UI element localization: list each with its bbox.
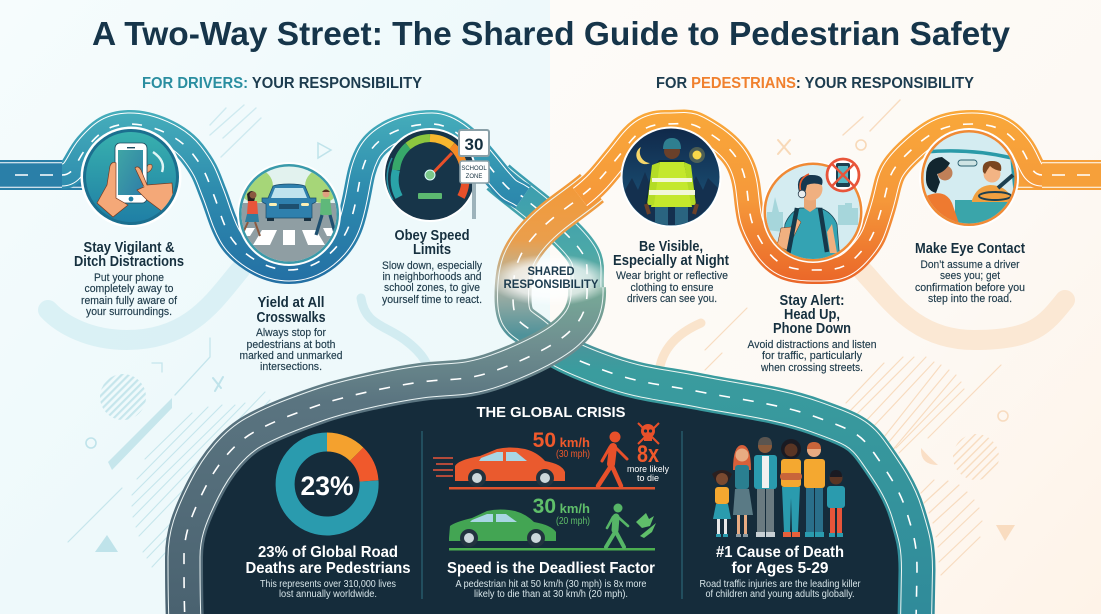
figure: girl [712, 470, 732, 537]
figure: boy [827, 470, 845, 537]
label: 50 km/h: (30 mph) [556, 449, 590, 460]
illustration: red car at 50 km/h [433, 448, 655, 490]
text block: 23% of road deaths: 23% of Global Road [258, 544, 398, 561]
text block: stay alert [748, 293, 876, 374]
text block: stay alert: Stay Alert: [780, 293, 844, 309]
illustration: green car at 30 km/h [449, 510, 655, 550]
text block: make eye contact: Make Eye Contact [915, 241, 1025, 257]
background: right half [550, 0, 1101, 614]
figure: woman with crossed arms [780, 439, 802, 537]
icon: speedometer with school zone sign: ZONE [466, 174, 482, 180]
label: shared responsibility [489, 254, 613, 306]
illustration: group of children and young adults [712, 437, 845, 537]
background: left half [0, 0, 550, 614]
text block: stay alert: when crossing streets. [760, 362, 863, 374]
text block: make eye contact: step into the road. [928, 293, 1012, 305]
icon: pedestrian with head up and headphones [762, 158, 864, 263]
text block: stay vigilant: Stay Vigilant & [84, 240, 175, 256]
text block: stay alert: for traffic, particularly [762, 350, 862, 362]
text block: yield at crosswalks [240, 295, 342, 373]
text block: stay vigilant: Put your phone [94, 272, 164, 284]
icon: eye contact with driver [919, 128, 1020, 232]
figure: woman [733, 445, 753, 537]
callout: 8x more likely to die [627, 441, 669, 484]
text block: be visible [613, 239, 729, 305]
text block: number one cause of death: of children and young adults globally. [706, 589, 854, 600]
chart: 23% donut [285, 442, 369, 526]
text block: number one cause of death: for Ages 5-29 [732, 560, 829, 577]
text block: 23% of road deaths [246, 544, 410, 600]
icon: hands holding a phone [80, 126, 182, 228]
text block: obey speed limits: Slow down, especially [382, 260, 482, 272]
icon: skull and crossbones [638, 423, 659, 444]
text block: number one cause of death: Road traffic injuries are the leading killer [700, 579, 861, 590]
panel: the global crisis dark area [184, 350, 917, 614]
icon: green pedestrian [606, 504, 628, 547]
text block: number one cause of death [700, 544, 861, 600]
text block: stay vigilant [74, 240, 184, 318]
icon: speedometer with school zone sign [383, 128, 489, 222]
label: 30 km/h: (20 mph) [556, 516, 590, 527]
label: 50 km/h: 50 km/h [533, 429, 590, 452]
road: pedestrians orange winding road [513, 124, 1101, 614]
text block: make eye contact: confirmation before you [915, 282, 1025, 294]
text block: yield at crosswalks: Yield at All [258, 295, 324, 311]
text block: obey speed limits: in neighborhoods and [382, 271, 482, 283]
decorative background shapes right [659, 100, 1065, 575]
label: 30 km/h: 30 km/h [533, 495, 590, 518]
text block: stay alert: Head Up, [784, 307, 840, 323]
heading: for pedestrians: FOR PEDESTRIANS: YOUR RESPONSIBILITY [656, 75, 974, 92]
road: grey road leading into the global crisis [184, 288, 587, 614]
callout: 8x more likely to die: to die [637, 473, 659, 484]
text block: stay vigilant: remain fully aware of [81, 295, 178, 307]
text block: obey speed limits: Obey Speed [394, 228, 470, 244]
text block: yield at crosswalks: Always stop for [256, 327, 326, 339]
text block: speed is the deadliest factor [447, 560, 655, 600]
callout: 8x more likely to die: more likely [627, 464, 669, 475]
icon: red pedestrian [598, 432, 627, 486]
icon: speedometer with school zone sign: SCHOOL [461, 166, 487, 172]
heading: for drivers: FOR DRIVERS: YOUR RESPONSIBILITY [142, 75, 422, 92]
text block: yield at crosswalks: Crosswalks [256, 310, 326, 326]
text block: stay vigilant: completely away to [84, 283, 174, 295]
icon: leaves sprig [636, 513, 656, 538]
text block: 23% of road deaths: This represents over 310,000 lives [260, 579, 396, 590]
text block: 23% of road deaths: lost annually worldwide. [279, 589, 377, 600]
text block: yield at crosswalks: marked and unmarked [240, 350, 342, 362]
text block: be visible: drivers can see you. [627, 293, 717, 305]
text block: be visible: Especially at Night [613, 253, 729, 269]
text block: obey speed limits [382, 228, 482, 306]
text block: obey speed limits: school zones, to give [384, 282, 480, 294]
decorative background shapes left [48, 105, 432, 567]
icon: speedometer with school zone sign: 30 [465, 135, 483, 154]
divider left [422, 431, 423, 599]
text block: yield at crosswalks: intersections. [260, 361, 322, 373]
text block: be visible: Wear bright or reflective [616, 270, 728, 282]
text block: obey speed limits: yourself time to react. [382, 294, 482, 306]
icon: person in reflective vest at night [620, 126, 722, 230]
text block: speed is the deadliest factor: likely to die than at 30 km/h (20 mph). [474, 589, 628, 600]
label: shared responsibility: RESPONSIBILITY [504, 277, 598, 291]
label: shared responsibility: SHARED [528, 264, 575, 278]
callout: 8x more likely to die: 8x [637, 441, 660, 468]
heading: the global crisis: THE GLOBAL CRISIS [476, 404, 626, 421]
icon: car yielding at crosswalk [237, 162, 341, 266]
figure: man in yellow shirt [804, 442, 825, 537]
text block: obey speed limits: Limits [413, 242, 451, 258]
text block: speed is the deadliest factor: Speed is the Deadliest Factor [447, 560, 655, 577]
text block: make eye contact [915, 241, 1025, 305]
chart: 23% donut: 23% [300, 471, 354, 501]
text block: be visible: Be Visible, [639, 239, 703, 255]
text block: stay alert: Phone Down [773, 321, 851, 337]
text block: make eye contact: Don’t assume a driver [920, 259, 1020, 271]
road: drivers blue winding road [0, 124, 587, 288]
figure: man with jacket [754, 437, 777, 537]
text block: 23% of road deaths: Deaths are Pedestrians [246, 560, 410, 577]
text block: stay vigilant: your surroundings. [86, 306, 172, 318]
text block: make eye contact: sees you; get [940, 270, 1000, 282]
text block: stay vigilant: Ditch Distractions [74, 254, 184, 270]
text block: number one cause of death: #1 Cause of Death [716, 544, 844, 561]
text block: yield at crosswalks: pedestrians at both [246, 339, 336, 351]
text block: be visible: clothing to ensure [630, 282, 714, 294]
title: A Two-Way Street: The Shared Guide to Pedestrian Safety [92, 15, 1011, 52]
divider right [682, 431, 683, 599]
text block: speed is the deadliest factor: A pedestrian hit at 50 km/h (30 mph) is 8x more [456, 579, 647, 590]
text block: stay alert: Avoid distractions and listen [748, 339, 876, 351]
